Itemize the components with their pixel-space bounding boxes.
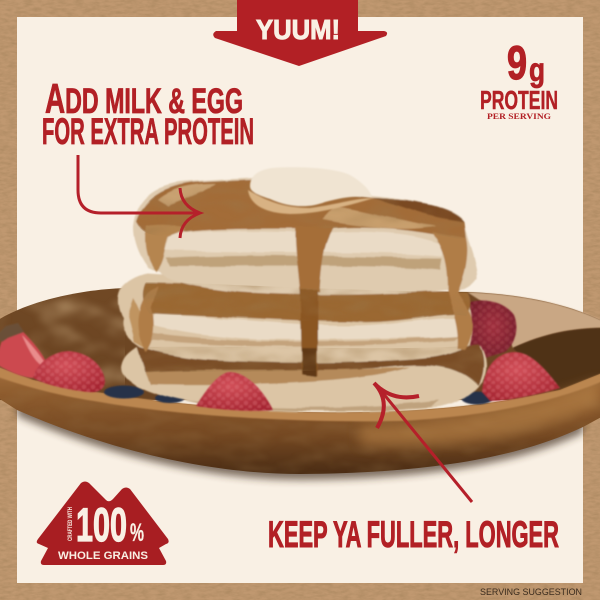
raspberries right <box>470 301 560 401</box>
plate shadow <box>17 400 583 480</box>
raspberry centre <box>196 372 273 411</box>
pancake stack <box>115 167 490 415</box>
griddle browning texture <box>139 181 482 386</box>
per serving label: PER SERVING <box>487 111 551 121</box>
photo: pancakes on wooden plate <box>0 167 600 480</box>
blueberries <box>104 386 493 404</box>
heading: add milk and egg <box>42 75 254 152</box>
banner arrow shape <box>213 0 387 66</box>
arrow: to bottom pancake <box>374 383 472 502</box>
middle pancake <box>118 273 472 363</box>
whole grains label: WHOLE GRAINS <box>58 550 148 562</box>
bottom pancake <box>122 347 486 412</box>
9g figure: 9 <box>507 36 527 89</box>
protein label: PROTEIN <box>480 85 558 115</box>
9g figure: g <box>529 51 545 88</box>
9g figure <box>507 36 545 89</box>
heading: add milk and egg: FOR EXTRA PROTEIN <box>42 111 254 152</box>
syrup drips <box>145 225 186 272</box>
crafted with label: CRAFTED WITH <box>67 507 74 541</box>
banner text: YUUM! <box>256 14 340 45</box>
strawberry left <box>0 323 48 378</box>
heading: add milk and egg: ADD MILK & EGG <box>45 75 243 122</box>
protein callout <box>480 36 558 121</box>
serving suggestion note: SERVING SUGGESTION <box>480 587 582 597</box>
badge mountains shape <box>37 482 169 565</box>
banner: YUUM! <box>213 0 387 66</box>
arrow: to top pancake <box>78 155 200 238</box>
top pancake <box>133 178 477 295</box>
badge: 100% whole grains <box>37 482 169 565</box>
percent sign: % <box>130 519 144 547</box>
100 figure: 100 <box>76 498 127 551</box>
plate <box>0 285 600 477</box>
butter pat <box>248 167 374 214</box>
raspberry left <box>33 351 105 392</box>
